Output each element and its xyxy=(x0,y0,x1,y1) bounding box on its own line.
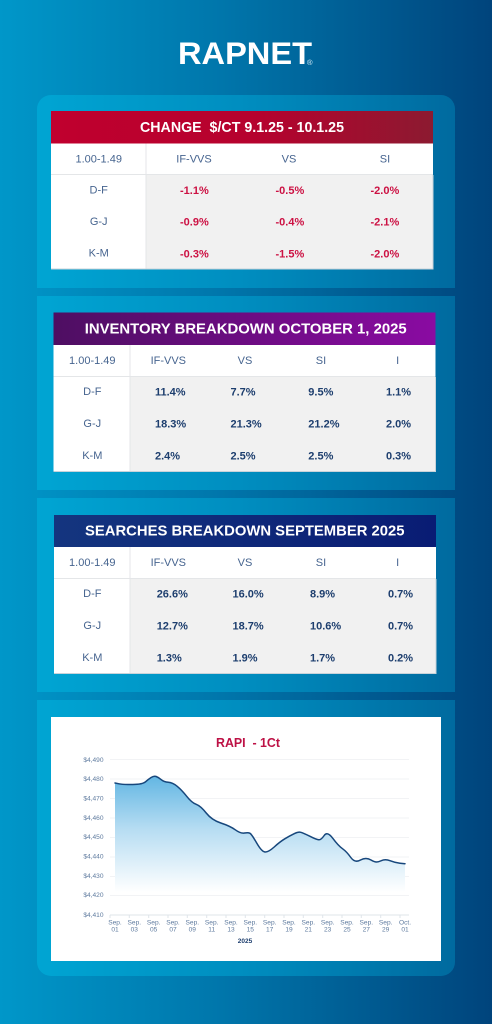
x axis labels: Sep. xyxy=(302,919,315,926)
panel: inventory breakdown xyxy=(37,296,455,490)
table: change $/ct xyxy=(51,111,433,269)
table: inventory breakdown xyxy=(54,312,436,472)
column headers: I xyxy=(396,557,399,569)
column headers: SI xyxy=(316,557,326,569)
column headers: VS xyxy=(282,154,296,166)
heading: inventory breakdown: INVENTORY BREAKDOWN OCTOBER 1, 2025 xyxy=(85,320,407,338)
values: 2.4% xyxy=(155,450,180,462)
x axis labels: Sep. xyxy=(128,919,141,926)
column headers xyxy=(75,154,390,166)
panel: searches breakdown xyxy=(37,498,455,692)
values xyxy=(180,185,399,260)
row labels: K-M xyxy=(82,450,102,462)
y axis labels: $4,430 xyxy=(83,873,104,880)
x axis labels: 07 xyxy=(169,927,177,934)
values: -0.3% xyxy=(180,248,209,260)
x axis labels: Sep. xyxy=(263,919,277,926)
values: 21.3% xyxy=(230,418,262,430)
values: 21.2% xyxy=(308,418,340,430)
table: searches breakdown xyxy=(54,515,436,674)
row labels: D-F xyxy=(83,386,102,398)
column headers: 1.00-1.49 xyxy=(69,355,116,367)
y axis labels: $4,480 xyxy=(83,776,104,783)
x axis labels: 29 xyxy=(382,927,390,934)
y axis labels: $4,440 xyxy=(83,854,104,860)
panel: change $/ct xyxy=(37,95,455,288)
values: -2.1% xyxy=(370,216,399,228)
column headers xyxy=(69,355,399,367)
column headers: IF-VVS xyxy=(151,557,186,569)
x axis title: 2025 xyxy=(238,938,253,945)
values: 7.7% xyxy=(230,386,256,398)
values: 1.3% xyxy=(157,652,182,664)
heading: change $/ct xyxy=(51,111,433,144)
x axis labels: Sep. xyxy=(186,919,199,926)
y axis labels: $4,450 xyxy=(83,834,104,841)
x axis labels: 17 xyxy=(266,927,274,934)
values: 0.7% xyxy=(388,620,413,632)
values xyxy=(155,386,411,462)
panel: RAPI chart xyxy=(37,700,455,976)
values: 2.0% xyxy=(386,418,411,430)
row labels: G-J xyxy=(90,216,108,228)
x axis labels: Sep. xyxy=(147,919,161,926)
row labels xyxy=(89,184,109,260)
values: -0.5% xyxy=(276,185,304,197)
x axis labels: Sep. xyxy=(166,919,180,926)
values: 0.7% xyxy=(388,588,413,600)
x axis labels: Sep. xyxy=(340,919,354,926)
x axis labels: Sep. xyxy=(360,919,373,926)
y axis labels: $4,470 xyxy=(83,796,104,802)
column headers: IF-VVS xyxy=(176,154,212,166)
x axis labels: 11 xyxy=(208,927,215,934)
values: 2.5% xyxy=(308,450,334,462)
x axis labels: Sep. xyxy=(244,919,257,926)
row labels: G-J xyxy=(83,620,101,632)
column headers: SI xyxy=(316,355,326,367)
heading: inventory breakdown xyxy=(54,312,436,345)
x axis labels: 15 xyxy=(247,927,254,934)
row labels xyxy=(82,386,102,462)
x axis labels: 03 xyxy=(131,927,138,934)
values: 1.7% xyxy=(310,652,335,664)
y axis labels: $4,460 xyxy=(83,815,104,822)
values: 9.5% xyxy=(308,386,334,398)
x axis labels: 01 xyxy=(401,927,409,934)
values: 1.9% xyxy=(232,652,258,664)
values: 8.9% xyxy=(310,588,335,600)
column headers: IF-VVS xyxy=(151,355,186,367)
values: 18.3% xyxy=(155,418,186,430)
x axis labels: 21 xyxy=(305,927,312,934)
values xyxy=(157,588,413,664)
row labels: D-F xyxy=(90,184,108,196)
values: 12.7% xyxy=(157,620,188,632)
column headers: I xyxy=(396,355,399,367)
column headers: VS xyxy=(238,557,252,569)
values: -1.1% xyxy=(180,185,209,197)
row labels xyxy=(82,588,102,664)
x axis labels: Sep. xyxy=(321,919,335,926)
x axis labels: 19 xyxy=(285,927,293,934)
values: 26.6% xyxy=(157,588,188,600)
values: 16.0% xyxy=(232,588,264,600)
row labels: K-M xyxy=(82,652,102,664)
logo: RAPNET: RAPNET xyxy=(178,35,312,71)
values: -2.0% xyxy=(370,185,399,197)
x axis labels: Sep. xyxy=(224,919,238,926)
x axis labels: Sep. xyxy=(108,919,122,926)
logo: RAPNET: ® xyxy=(307,58,313,67)
x axis labels xyxy=(108,919,411,934)
chart title: RAPI - 1Ct xyxy=(216,735,281,750)
values: 0.3% xyxy=(386,450,411,462)
x axis labels: Oct. xyxy=(399,919,411,926)
x axis labels: 05 xyxy=(150,927,158,934)
y axis labels: $4,490 xyxy=(83,757,104,764)
row labels: G-J xyxy=(83,418,101,430)
column headers: 1.00-1.49 xyxy=(69,557,116,569)
x axis labels: 13 xyxy=(227,927,235,934)
area under line xyxy=(115,776,405,892)
column headers: SI xyxy=(380,154,390,166)
row labels: D-F xyxy=(83,588,102,600)
x axis labels: Sep. xyxy=(379,919,393,926)
column headers xyxy=(69,557,399,569)
values: -0.9% xyxy=(180,216,209,228)
values: -1.5% xyxy=(276,248,304,260)
chart card xyxy=(51,717,441,961)
heading: change $/ct: CHANGE $/CT 9.1.25 - 10.1.25 xyxy=(140,119,344,136)
values: -2.0% xyxy=(370,248,399,260)
row labels: K-M xyxy=(89,248,109,260)
values: 18.7% xyxy=(232,620,264,632)
column headers: VS xyxy=(238,355,252,367)
heading: searches breakdown: SEARCHES BREAKDOWN SEPTEMBER 2025 xyxy=(85,522,404,540)
values: 0.2% xyxy=(388,652,413,664)
x axis labels: Sep. xyxy=(282,919,296,926)
y axis labels: $4,420 xyxy=(83,892,104,899)
values: 11.4% xyxy=(155,386,186,398)
y axis labels xyxy=(83,757,104,919)
x axis labels: 27 xyxy=(363,927,370,934)
values: 10.6% xyxy=(310,620,341,632)
price line xyxy=(115,776,405,864)
values: 2.5% xyxy=(230,450,256,462)
x axis labels: 01 xyxy=(111,927,119,934)
x axis labels: 23 xyxy=(324,927,332,934)
x axis labels: Sep. xyxy=(205,919,219,926)
x axis labels: 25 xyxy=(343,927,351,934)
y axis labels: $4,410 xyxy=(83,912,104,919)
values: -0.4% xyxy=(276,216,304,228)
values: 1.1% xyxy=(386,386,411,398)
heading: searches breakdown xyxy=(54,515,436,547)
x axis labels: 09 xyxy=(189,927,196,934)
column headers: 1.00-1.49 xyxy=(75,154,122,166)
